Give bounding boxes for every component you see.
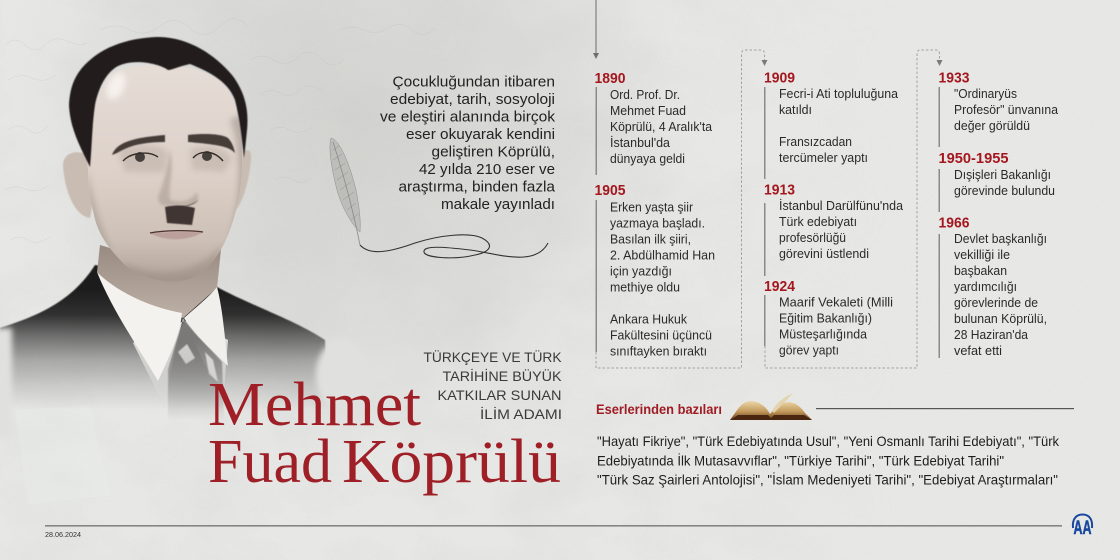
- entry 1933: değer görüldü: [954, 118, 1030, 133]
- works list: Edebiyatında İlk Mutasavvıflar", "Türkiye Tarihi", "Türk Edebiyat Tarihi": [597, 452, 1004, 468]
- footer rule: [45, 525, 1062, 527]
- works heading: Eserlerinden bazıları: [596, 402, 722, 417]
- entry 1905: methiye oldu: [610, 280, 680, 294]
- entry 1913: İstanbul Darülfünu'nda: [779, 198, 904, 213]
- entry 1905: Basılan ilk şiiri,: [610, 232, 691, 246]
- entry 1909: [764, 70, 899, 179]
- entry 1966: 28 Haziran'da: [954, 327, 1029, 342]
- suit edge fades: [0, 328, 368, 438]
- entry 1913: görevini üstlendi: [779, 246, 869, 261]
- intro paragraph: edebiyat, tarih, sosyoloji: [390, 91, 555, 108]
- neck: [97, 240, 222, 318]
- eyes: [123, 151, 223, 164]
- suit: [0, 264, 326, 403]
- title: Köprülü: [342, 428, 561, 496]
- nose shadow: [158, 150, 198, 206]
- entry 1909: Fransızcadan: [779, 134, 852, 149]
- entry 1905: 2. Abdülhamid Han: [610, 248, 715, 262]
- background paper texture: [5, 0, 668, 510]
- moustache: [165, 206, 195, 225]
- subtitle: TÜRKÇEYE VE TÜRK: [424, 348, 562, 365]
- subtitle: İLİM ADAMI: [480, 405, 562, 422]
- entry 1905: Fakültesini üçüncü: [610, 328, 712, 342]
- portrait of Mehmet Fuad Köprülü: [0, 36, 326, 415]
- works list: [597, 433, 1060, 488]
- entry 1966: görevlerinde de: [954, 295, 1038, 310]
- face: [87, 65, 242, 282]
- entry 1924: 1924: [764, 279, 795, 295]
- entry 1933: Profesör" ünvanına: [954, 102, 1059, 117]
- entry 1924: görev yaptı: [779, 342, 839, 358]
- entry 1909: 1909: [764, 70, 795, 86]
- nostrils: [160, 200, 198, 207]
- entry 1890: [594, 71, 713, 175]
- intro paragraph: Çocukluğundan itibaren: [392, 74, 555, 90]
- timeline column 2: [764, 70, 904, 358]
- entry 1924: [764, 279, 893, 358]
- eyebrows: [112, 134, 235, 155]
- intro paragraph: ve eleştiri alanında birçok: [380, 108, 555, 126]
- timeline column 1: [594, 71, 715, 358]
- face left shadow: [88, 178, 110, 247]
- eye socket shadow: [118, 145, 232, 172]
- works list: "Hayatı Fikriye", "Türk Edebiyatında Usul", "Yeni Osmanlı Tarihi Edebiyatı", "Türk: [597, 433, 1060, 449]
- face right shadow: [228, 114, 242, 230]
- entry 1905: sınıftayken bıraktı: [610, 344, 707, 358]
- icon: AA logo: AA: [1074, 518, 1092, 539]
- entry 1933: [938, 70, 1059, 147]
- works list: "Türk Saz Şairleri Antolojisi", "İslam Medeniyeti Tarihi", "Edebiyat Araştırmaları": [597, 470, 1058, 488]
- entry 1950-1955: [938, 151, 1055, 212]
- intro paragraph: geliştiren Köprülü,: [432, 144, 555, 160]
- subtitle: TARİHİNE BÜYÜK: [442, 367, 562, 384]
- entry 1909: Fecri-i Ati topluluğuna: [779, 86, 899, 101]
- entry 1966: vekilliği ile: [954, 247, 1010, 262]
- entry 1950-1955: Dışişleri Bakanlığı: [954, 167, 1051, 182]
- title: [208, 371, 561, 496]
- necktie: [168, 319, 224, 425]
- entry 1950-1955: 1950-1955: [938, 151, 1008, 167]
- entry 1966: bulunan Köprülü,: [954, 311, 1047, 326]
- mouth: [150, 231, 203, 239]
- entry 1905: yazmaya başladı.: [610, 216, 705, 230]
- hair: [69, 37, 247, 167]
- forehead highlight: [106, 72, 126, 100]
- entry 1966: Devlet başkanlığı: [954, 231, 1047, 246]
- entry 1966: 1966: [938, 216, 970, 232]
- title: Mehmet: [208, 371, 421, 439]
- intro paragraph: makale yayınladı: [441, 196, 555, 213]
- entry 1924: Müsteşarlığında: [779, 326, 868, 342]
- right collar: [184, 287, 228, 366]
- entry 1966: vefat etti: [954, 343, 1002, 358]
- entry 1905: [594, 183, 715, 358]
- intro paragraph: araştırma, binden fazla: [398, 178, 556, 196]
- entry 1905: Erken yaşta şiir: [610, 200, 694, 214]
- entry 1933: "Ordinaryüs: [954, 86, 1017, 101]
- intro paragraph: [380, 74, 556, 213]
- entry 1890: dünyaya geldi: [610, 151, 685, 166]
- entry 1905: 1905: [594, 183, 626, 199]
- entry 1966: yardımcılığı: [954, 279, 1017, 294]
- entry 1950-1955: görevinde bulundu: [954, 183, 1055, 198]
- entry 1890: Ord. Prof. Dr.: [610, 87, 680, 102]
- intro paragraph: 42 yılda 210 eser ve: [419, 161, 555, 178]
- icon: AA logo: [1073, 514, 1092, 539]
- timeline connector arrows: [593, 0, 942, 368]
- entry 1966: [938, 216, 1047, 358]
- entry 1905: için yazdığı: [610, 264, 672, 278]
- subtitle: KATKILAR SUNAN: [438, 387, 562, 403]
- subtitle: [424, 348, 562, 422]
- works divider line: [816, 408, 1074, 409]
- entry 1924: Maarif Vekaleti (Milli: [779, 294, 893, 310]
- icon: quill and ink flourish: [330, 138, 548, 258]
- entry 1890: Mehmet Fuad: [610, 103, 686, 118]
- entry 1913: Türk edebiyatı: [779, 214, 857, 229]
- left collar: [97, 272, 182, 381]
- ears: [63, 150, 251, 218]
- entry 1890: Köprülü, 4 Aralık'ta: [610, 119, 713, 134]
- entry 1909: tercümeler yaptı: [779, 150, 868, 165]
- entry 1913: [764, 182, 904, 276]
- date: 28.06.2024: [45, 530, 81, 539]
- entry 1966: başbakan: [954, 263, 1007, 278]
- entry 1909: katıldı: [779, 102, 812, 117]
- entry 1905: Ankara Hukuk: [610, 312, 687, 326]
- intro paragraph: eser okuyarak kendini: [406, 126, 555, 143]
- entry 1913: profesörlüğü: [779, 230, 846, 245]
- shirt front: [133, 318, 228, 388]
- entry 1890: 1890: [594, 71, 626, 87]
- timeline column 3: [938, 70, 1059, 358]
- title: Fuad: [208, 428, 332, 496]
- jaw shadow: [127, 249, 220, 282]
- entry 1890: İstanbul'da: [610, 135, 671, 150]
- icon: open book: [730, 393, 812, 420]
- entry 1924: Eğitim Bakanlığı): [779, 310, 872, 326]
- entry 1933: 1933: [938, 70, 970, 86]
- entry 1913: 1913: [764, 182, 795, 198]
